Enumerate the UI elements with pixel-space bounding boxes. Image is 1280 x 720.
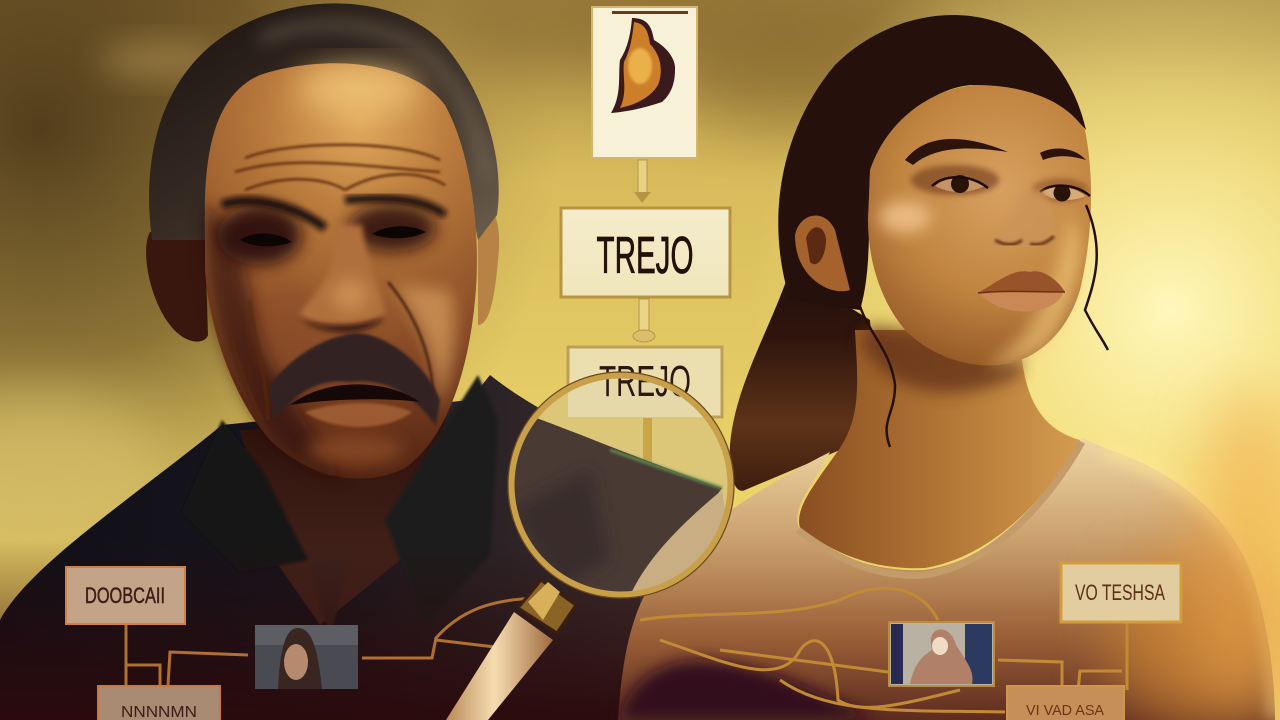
man shirt xyxy=(0,375,722,720)
woman ponytail xyxy=(730,270,872,491)
name box xyxy=(66,567,185,624)
man mustache xyxy=(270,333,440,425)
card bar xyxy=(612,11,688,14)
face right light xyxy=(985,215,1080,366)
shirt shadow bottom xyxy=(618,660,880,720)
loose hair strands xyxy=(856,205,1108,447)
woman eyes xyxy=(905,139,1090,202)
name chain: top to bottom xyxy=(561,7,730,417)
name box xyxy=(1061,563,1181,622)
man mouth xyxy=(290,384,420,465)
man hair highlight xyxy=(260,25,488,180)
TREJO card 2: TREJO xyxy=(599,357,691,406)
photo card xyxy=(592,7,697,158)
photo xyxy=(889,622,994,686)
ring xyxy=(511,375,731,595)
magnifying glass xyxy=(446,347,740,720)
man portrait xyxy=(0,3,722,720)
neckline xyxy=(798,442,1082,575)
woman ear xyxy=(795,215,850,291)
name box lower xyxy=(1007,686,1124,720)
handle xyxy=(446,612,553,720)
name box lower: VI VAD ASA xyxy=(1026,702,1104,719)
woman lips xyxy=(978,271,1065,312)
TREJO card: TREJO xyxy=(596,227,694,285)
lens xyxy=(514,392,728,592)
lens: TREJO xyxy=(599,357,691,406)
woman hair cap xyxy=(778,15,1086,310)
face shading xyxy=(204,68,455,478)
right family tree xyxy=(640,563,1181,720)
neck xyxy=(518,580,576,633)
man hair xyxy=(149,3,499,240)
woman portrait xyxy=(618,15,1280,720)
man left ear xyxy=(146,232,208,342)
man face xyxy=(205,63,477,479)
man neck xyxy=(240,420,445,625)
name box lower xyxy=(98,686,220,720)
name box: VO TESHSA xyxy=(1075,580,1165,605)
man nose xyxy=(300,225,386,332)
connectors xyxy=(640,588,1127,712)
bottom dark wash xyxy=(0,540,640,720)
woman face xyxy=(868,85,1091,365)
shirt rim light xyxy=(1105,450,1275,720)
name box: DOOBCAII xyxy=(85,583,165,608)
photo xyxy=(255,625,358,689)
left family tree xyxy=(66,567,545,720)
arrow 2 xyxy=(633,299,655,342)
shirt warm side xyxy=(1110,550,1270,720)
arrow 1 xyxy=(634,160,651,203)
man collar xyxy=(182,375,498,640)
connectors xyxy=(126,597,545,687)
TREJO card 2 xyxy=(568,347,722,417)
warm wash xyxy=(1190,390,1280,720)
neck shadow xyxy=(860,325,1020,393)
man wrinkles xyxy=(232,145,445,420)
man right ear xyxy=(478,208,499,325)
woman neck and chest xyxy=(799,330,1080,568)
man eyes xyxy=(218,199,445,265)
cheek light xyxy=(879,201,931,233)
woman shirt xyxy=(618,438,1275,720)
TREJO card xyxy=(561,208,730,297)
portrait in card xyxy=(611,18,675,113)
woman nose xyxy=(990,190,1055,247)
